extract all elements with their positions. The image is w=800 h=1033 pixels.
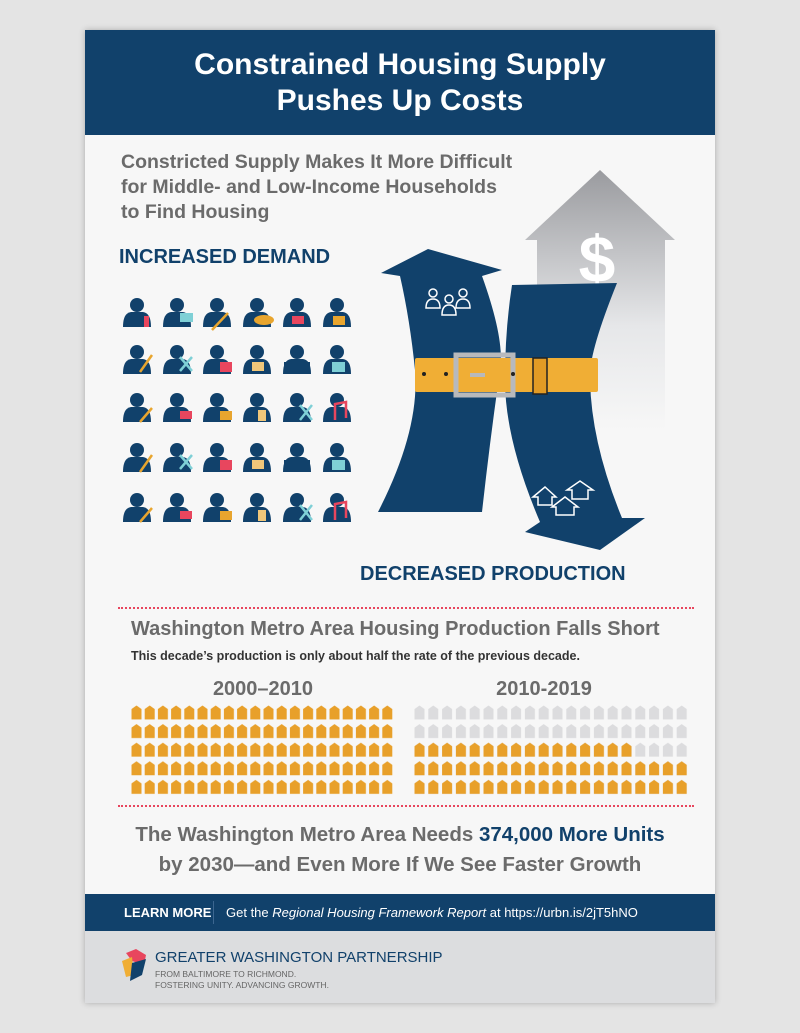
subtitle: for Middle- and Low-Income Households [121,176,497,198]
callout: 374,000 units: by 2030—and Even More If We See Faster Growth [159,853,641,876]
icon: gray up arrow with dollar: $ [579,222,615,296]
subtitle: to Find Housing [121,201,269,223]
learn more bar: LEARN MORE [124,905,211,920]
arrow: demand up / production down X [378,249,645,550]
icon: belt [415,355,598,395]
chart: housing unit grids [132,706,687,794]
footer: partnership logo [85,931,715,1003]
icon: gray up arrow with dollar [525,170,675,430]
heading: production falls short: Washington Metro Area Housing Production Falls Short [131,618,660,640]
icon: logo mark [122,949,146,981]
icon: people [426,289,470,315]
title banner: Constrained Housing Supply [194,48,606,81]
heading: decreased production: DECREASED PRODUCTION [360,563,626,585]
learn more bar [85,894,715,931]
label: 2000–2010: 2000–2010 [213,678,313,700]
callout: 374,000 units [135,823,665,876]
footer: partnership logo: GREATER WASHINGTON PARTNERSHIP [155,949,443,966]
subtitle [121,151,512,223]
heading: increased demand: INCREASED DEMAND [119,246,330,268]
title banner [85,30,715,135]
subtitle: Constricted Supply Makes It More Difficult [121,151,512,173]
footer: partnership logo: FOSTERING UNITY. ADVANCING GROWTH. [155,980,329,990]
text: production note: This decade’s production is only about half the rate of the previous decade. [131,649,580,663]
footer: partnership logo: FROM BALTIMORE TO RICHMOND. [155,969,296,979]
graphic: squeezed X with belt and rising cost arrow [378,170,675,550]
learn more bar: Get the Regional Housing Framework Report at https://urbn.is/2jT5hNO [226,905,638,920]
title banner: Pushes Up Costs [277,84,523,117]
callout: 374,000 units: The Washington Metro Area Needs 374,000 More Units [135,823,665,846]
card [85,30,715,1003]
icon: houses [533,481,593,515]
icon grid: workers [123,298,351,523]
label: 2010-2019: 2010-2019 [496,678,592,700]
